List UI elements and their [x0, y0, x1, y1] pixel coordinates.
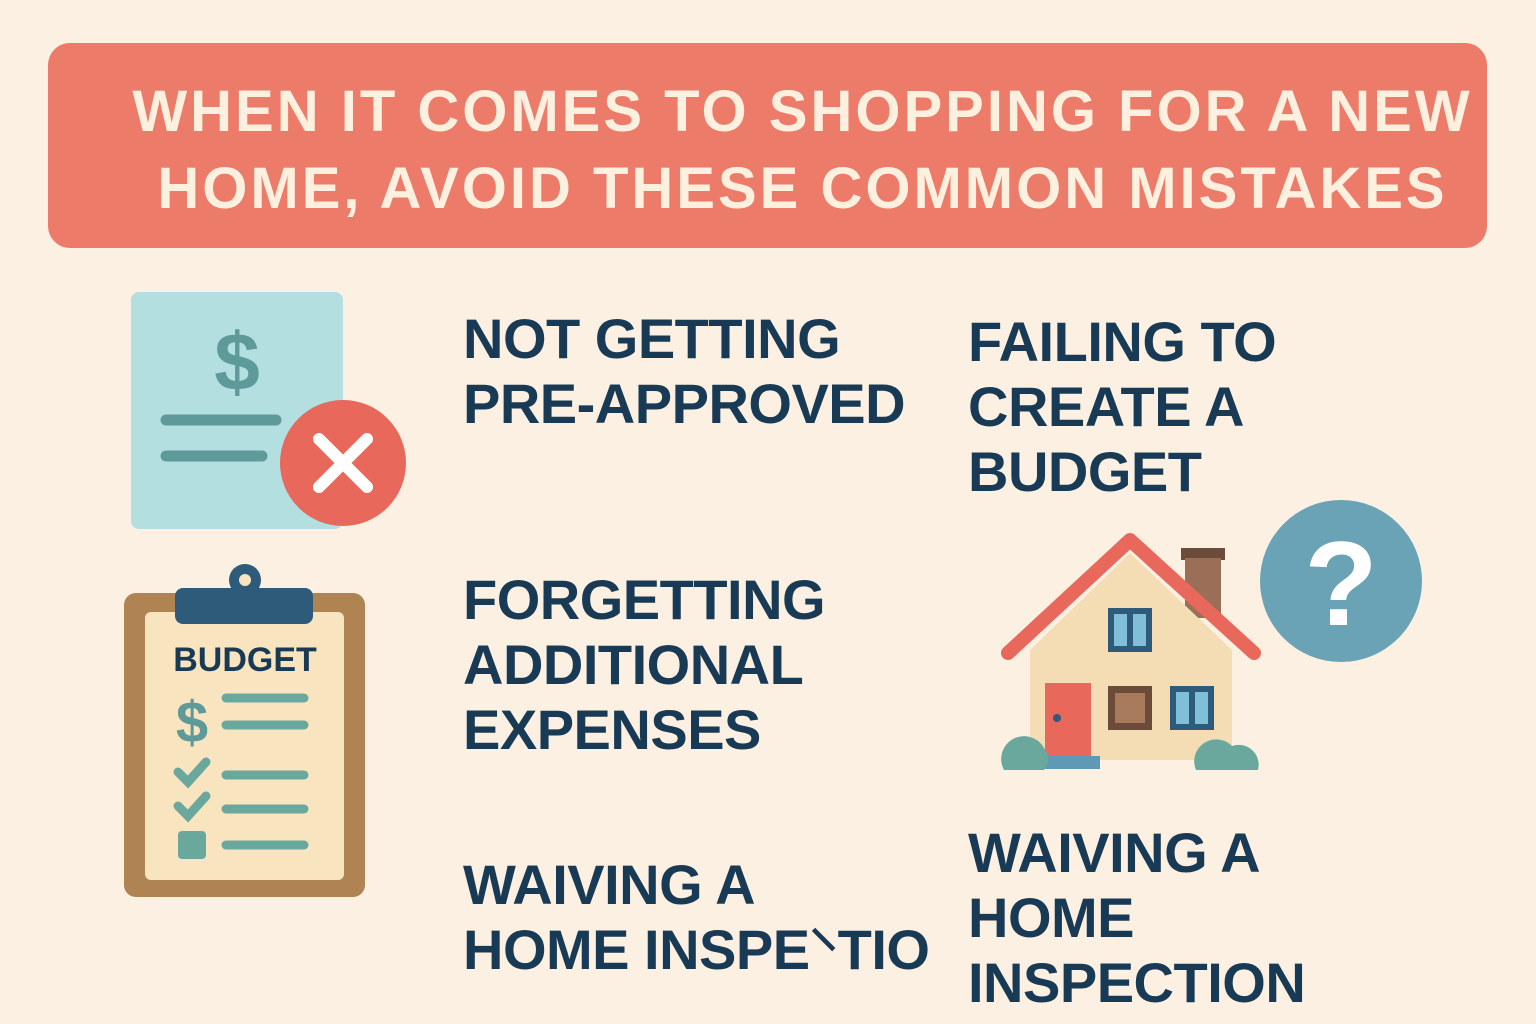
icon: pre-approval document with red X: $ — [214, 317, 260, 408]
icon: budget clipboard: $ — [176, 690, 208, 755]
text: waiving a home inspection (right): INSPECTION — [968, 951, 1305, 1014]
text: failing to create a budget: BUDGET — [968, 440, 1201, 503]
title banner — [48, 43, 1487, 248]
title line 2: HOME, AVOID THESE COMMON MISTAKES — [157, 156, 1448, 221]
icon: budget clipboard — [124, 564, 365, 897]
text: forgetting additional expenses — [463, 568, 825, 761]
icon: house with question mark: ? — [1304, 517, 1378, 651]
text: forgetting additional expenses: EXPENSES — [463, 698, 761, 761]
text: waiving a home inspection (left): HOME INSPE⸌TIO — [463, 918, 929, 981]
text: waiving a home inspection (left) — [463, 853, 929, 981]
icon: pre-approval document with red X — [131, 292, 406, 529]
title line 1: WHEN IT COMES TO SHOPPING FOR A NEW — [132, 79, 1473, 144]
icon: budget clipboard: BUDGET — [173, 641, 317, 679]
icon: house with question mark — [1001, 500, 1422, 770]
text: not getting pre-approved: NOT GETTING — [463, 307, 840, 370]
text: waiving a home inspection (left): WAIVING A — [463, 853, 755, 916]
text: failing to create a budget — [968, 310, 1276, 503]
text: forgetting additional expenses: ADDITIONAL — [463, 633, 803, 696]
text: not getting pre-approved: PRE-APPROVED — [463, 372, 905, 435]
text: forgetting additional expenses: FORGETTING — [463, 568, 825, 631]
text: failing to create a budget: CREATE A — [968, 375, 1244, 438]
text: waiving a home inspection (right): HOME — [968, 886, 1134, 949]
text: waiving a home inspection (right): WAIVING A — [968, 821, 1260, 884]
text: waiving a home inspection (right) — [968, 821, 1305, 1014]
text: not getting pre-approved — [463, 307, 905, 435]
text: failing to create a budget: FAILING TO — [968, 310, 1276, 373]
